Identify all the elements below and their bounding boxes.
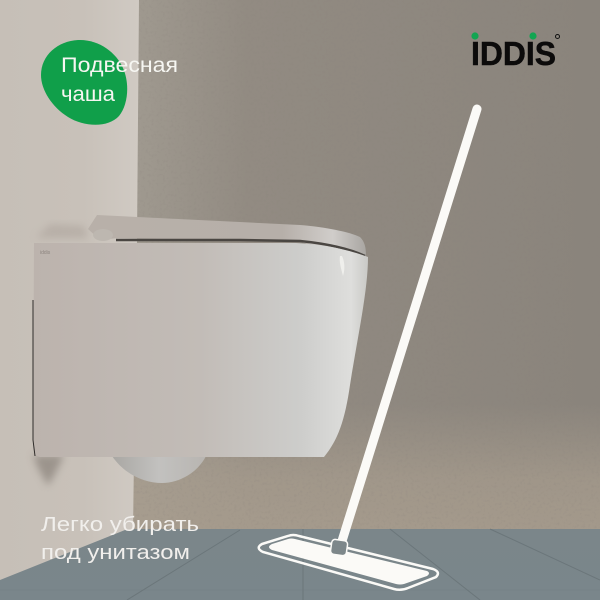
body highlight: [340, 256, 344, 276]
mop head pad: [269, 538, 429, 584]
toilet seat: [88, 215, 366, 256]
toilet body: [33, 243, 368, 457]
toilet: [33, 215, 368, 483]
shadow under toilet on wall: [33, 455, 64, 486]
heading: suspended bowl: [61, 54, 178, 106]
caption: easy to clean: [41, 513, 199, 564]
back concrete wall: [130, 0, 600, 532]
icon: mop: [259, 109, 477, 590]
seat hinge: [93, 229, 113, 241]
left plaster wall: [0, 0, 139, 580]
small brand mark: iddis: [40, 250, 51, 256]
heading: suspended bowl: чаша: [61, 83, 115, 106]
rear wall contact line: [33, 300, 35, 456]
seat gap: [116, 240, 365, 256]
caption: easy to clean: Легко убирать: [41, 513, 199, 536]
logo: IDDIS: IDDIS: [471, 35, 556, 72]
mop head outline: [259, 535, 438, 590]
mop connector: [330, 539, 348, 556]
green blob badge: [41, 40, 127, 125]
caption: easy to clean: под унитазом: [41, 541, 190, 564]
heading: suspended bowl: Подвесная: [61, 54, 178, 77]
shadow above toilet on wall: [36, 224, 88, 238]
mop handle: [342, 109, 477, 541]
floor: [0, 529, 600, 600]
bowl underside dome: [112, 456, 206, 483]
